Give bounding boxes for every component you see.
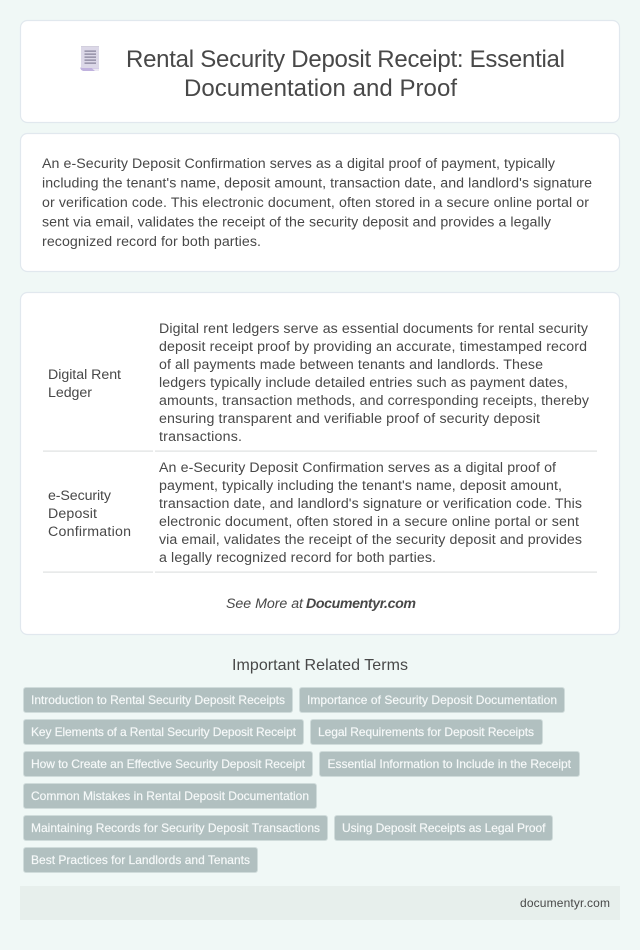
text block: intro paragraph: including the tenant's name, deposit amount, transaction date, and landlord's signature <box>42 176 592 192</box>
tag: How to Create an Effective Security Deposit Receipt <box>31 757 306 771</box>
row description <box>159 321 590 445</box>
tag: Legal Requirements for Deposit Receipts <box>318 725 534 739</box>
table row: e-Security Deposit Confirmation <box>48 460 582 566</box>
tag: Introduction to Rental Security Deposit Receipts <box>31 693 285 707</box>
row description: ledgers typically include detailed entries such as payment dates, <box>159 375 568 391</box>
tag: Using Deposit Receipts as Legal Proof <box>342 821 546 835</box>
footer <box>20 886 620 920</box>
see more link <box>226 596 416 612</box>
see more link: Documentyr.com <box>306 596 416 612</box>
title: Rental Security Deposit Receipt: Essential <box>126 46 565 73</box>
table row: Digital Rent Ledger <box>48 321 590 445</box>
row description: payment, typically including the tenant's name, deposit amount, <box>159 478 562 494</box>
row description <box>159 460 582 566</box>
title: Documentation and Proof <box>184 75 457 102</box>
panel: header <box>20 20 620 122</box>
see more link: See More at <box>226 596 304 612</box>
tag <box>24 720 304 744</box>
row label: Ledger <box>48 385 92 401</box>
row description: transactions. <box>159 429 242 445</box>
tag <box>310 720 542 744</box>
row label <box>48 488 131 540</box>
title <box>126 46 565 102</box>
icon: receipt <box>80 46 99 71</box>
row description: deposit receipt proof by providing an accurate, timestamped record <box>159 339 587 355</box>
tag: Essential Information to Include in the Receipt <box>328 757 572 771</box>
row description: An e-Security Deposit Confirmation serves as a digital proof of <box>159 460 556 476</box>
row label: Deposit <box>48 506 97 522</box>
text block: intro paragraph <box>42 156 592 250</box>
panel: comparison table <box>20 292 620 634</box>
tag <box>24 816 328 840</box>
tag: Best Practices for Landlords and Tenants <box>31 853 250 867</box>
tag <box>24 688 292 712</box>
row description: a legally recognized record for both parties. <box>159 550 436 566</box>
tag <box>300 688 564 712</box>
row description: ensuring transparent and verifiable proof of security deposit <box>159 411 540 427</box>
text block: intro paragraph: sent via email, validates the receipt of the security deposit and provides a legally <box>42 214 552 230</box>
row description: via email, validates the receipt of the security deposit and provides <box>159 532 582 548</box>
row description: transaction date, and landlord's signature or verification code. This <box>159 496 582 512</box>
tag list: related terms <box>24 688 580 872</box>
row label: Confirmation <box>48 524 131 540</box>
row description: amounts, transaction methods, and corresponding receipts, thereby <box>159 393 590 409</box>
text block: intro paragraph: recognized record for both parties. <box>42 234 261 250</box>
panel: introduction <box>20 134 620 272</box>
row description: of all payments made between tenants and landlords. These <box>159 357 543 373</box>
heading: related terms: Important Related Terms <box>232 657 408 674</box>
row description: electronic document, often stored in a secure online portal or sent <box>159 514 579 530</box>
text block: intro paragraph: An e-Security Deposit Confirmation serves as a digital proof of payment, typically <box>42 156 556 172</box>
row label: e-Security <box>48 488 112 504</box>
tag <box>24 848 258 872</box>
tag <box>24 784 316 808</box>
tag: Common Mistakes in Rental Deposit Documentation <box>31 789 309 803</box>
tag <box>320 752 580 776</box>
tag <box>334 816 552 840</box>
row description: Digital rent ledgers serve as essential documents for rental security <box>159 321 589 337</box>
footer: documentyr.com <box>520 896 610 910</box>
row label <box>48 367 121 401</box>
tag: Importance of Security Deposit Documentation <box>307 693 557 707</box>
tag: Maintaining Records for Security Deposit Transactions <box>31 821 320 835</box>
text block: intro paragraph: or verification code. This electronic document, often stored in a secure online portal or <box>42 195 589 211</box>
tag: Key Elements of a Rental Security Deposit Receipt <box>31 725 297 739</box>
tag <box>24 752 312 776</box>
row label: Digital Rent <box>48 367 121 383</box>
